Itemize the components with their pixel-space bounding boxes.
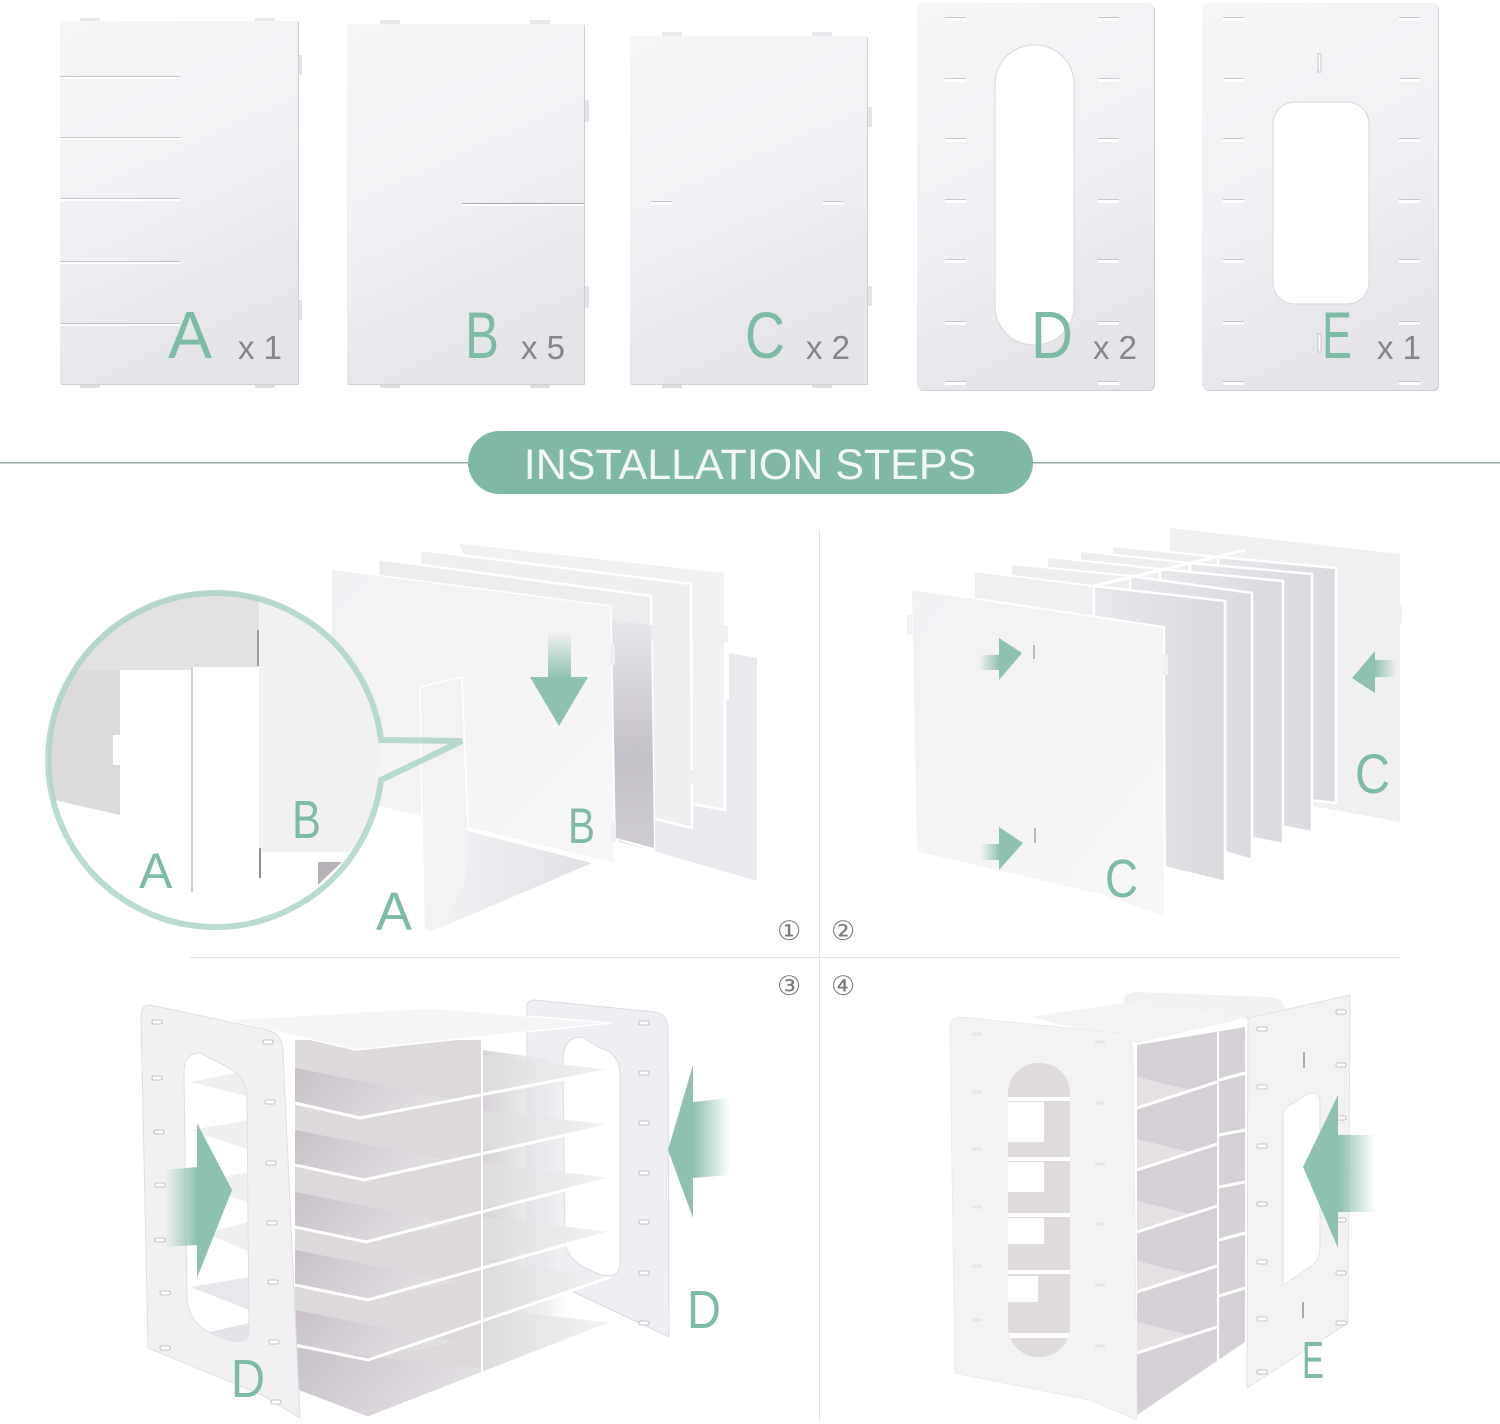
- panel: part C x2: C: [745, 298, 785, 372]
- panel: part A x1: A: [168, 298, 212, 373]
- E panel: [1247, 995, 1350, 1388]
- arrow: down: [530, 631, 588, 726]
- label: B: B: [568, 798, 595, 854]
- heading: installation steps: INSTALLATION STEPS: [524, 441, 976, 489]
- D panel opening: [1008, 1063, 1070, 1357]
- panel: part C x2: x 2: [806, 329, 850, 366]
- label: inset A: A: [139, 843, 173, 899]
- arrow: left-pointing: [1352, 651, 1397, 693]
- arrow: left-pointing: [668, 1065, 730, 1218]
- arrow: left-pointing: [1303, 1095, 1375, 1248]
- top shelf: [226, 1008, 611, 1050]
- panel: part D x2: D: [1031, 298, 1073, 373]
- label: D left: D: [231, 1349, 265, 1409]
- label: inset B: B: [292, 790, 321, 850]
- D panel front: [950, 1017, 1137, 1420]
- magnified detail circle: [40, 585, 462, 935]
- label: D right: D: [687, 1280, 721, 1340]
- label: C back: C: [1355, 742, 1390, 805]
- step number 2: ②: [831, 916, 855, 947]
- right shelf backing: [482, 1050, 570, 1372]
- label: C front: C: [1105, 849, 1138, 909]
- panel: part D x2: x 2: [1093, 329, 1137, 366]
- step number 3: ③: [777, 971, 801, 1002]
- panel: part A x1: x 1: [238, 329, 282, 366]
- label: A: A: [376, 882, 412, 942]
- step 4: attach E back panel: [950, 992, 1375, 1420]
- panel: part E x1: E: [1322, 298, 1352, 372]
- divider line behind heading: [0, 462, 1500, 464]
- panel: part E x1: [1202, 3, 1439, 391]
- arrow: upper right-pointing: [979, 638, 1022, 680]
- right D panel: [527, 1000, 669, 1337]
- step number 4: ④: [831, 971, 855, 1002]
- heading: installation steps: [468, 431, 1033, 494]
- step 2: add C panels: [907, 528, 1402, 917]
- panel: part D x2: [917, 3, 1155, 391]
- panel: part B x5: x 5: [521, 329, 565, 366]
- step 3: attach D end panels: [141, 1000, 730, 1418]
- label: E: E: [1302, 1332, 1324, 1390]
- panel: part B x5: [347, 20, 589, 388]
- panel: part E x1: x 1: [1377, 329, 1421, 366]
- arrow: lower right-pointing: [981, 827, 1023, 870]
- panel: part B x5: B: [465, 298, 499, 372]
- left D panel: [141, 1005, 300, 1418]
- panel: part A x1: [60, 18, 302, 388]
- arrow: right-pointing: [165, 1123, 232, 1278]
- panel: part C x2: [630, 32, 872, 388]
- step 1: insert B panels into A: [331, 542, 757, 942]
- step number 1: ①: [777, 916, 801, 947]
